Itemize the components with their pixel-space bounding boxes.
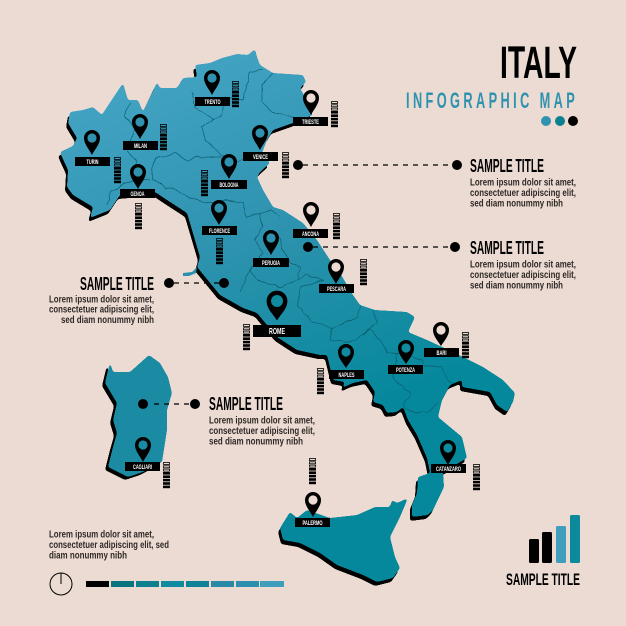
pin: Bologna bbox=[221, 154, 237, 179]
pin: Venice bbox=[252, 125, 268, 150]
label: Milan: MILAN bbox=[134, 143, 147, 150]
label: Bari: BARI bbox=[436, 350, 447, 357]
pin: Perugia bbox=[263, 230, 279, 255]
label: Catanzaro: CATANZARO bbox=[436, 466, 461, 473]
label: Venice bbox=[243, 152, 278, 161]
label: Naples bbox=[329, 370, 364, 379]
leader dots bbox=[138, 160, 462, 409]
label: Bari bbox=[424, 348, 459, 357]
label: Perugia: PERUGIA bbox=[262, 260, 280, 267]
bottom text block: diam nonummy nibh bbox=[49, 550, 127, 562]
bottom text block: consectetuer adipiscing elit, sed bbox=[49, 540, 169, 551]
label: Palermo bbox=[295, 518, 330, 527]
callout: left: sed diam nonummy nibh bbox=[61, 315, 154, 326]
label: Bologna: BOLOGNA bbox=[220, 182, 239, 189]
callout: upper right: SAMPLE TITLE bbox=[470, 156, 544, 176]
label: Pescara bbox=[319, 284, 354, 293]
title: ITALY bbox=[500, 37, 577, 88]
pin: Genoa bbox=[130, 164, 146, 189]
label: Bologna bbox=[211, 180, 247, 189]
callout: Sardinia bbox=[209, 394, 315, 448]
leader lines bbox=[154, 165, 452, 404]
bar chart bbox=[529, 515, 580, 563]
label: Cagliari bbox=[125, 462, 160, 471]
label: Ancona bbox=[293, 229, 328, 238]
pin: Pescara bbox=[328, 259, 344, 284]
pin: Florence bbox=[211, 200, 227, 225]
label: Trento bbox=[195, 97, 230, 106]
callout: upper right: sed diam nonummy nibh bbox=[470, 198, 563, 210]
callout: upper right bbox=[470, 156, 576, 210]
label: Cagliari: CAGLIARI bbox=[133, 464, 152, 471]
callout: middle right: Lorem ipsum dolor sit amet, bbox=[470, 260, 576, 270]
label: Palermo: PALERMO bbox=[302, 520, 322, 527]
callout: middle right: consectetuer adipiscing elit, bbox=[470, 270, 576, 281]
label: Pescara: PESCARA bbox=[327, 286, 346, 293]
callout: middle right: SAMPLE TITLE bbox=[470, 238, 544, 258]
callout: Sardinia: sed diam nonummy nibh bbox=[209, 436, 303, 448]
label: Genoa: GENOA bbox=[130, 191, 145, 198]
callout: left bbox=[49, 274, 154, 326]
pin: Naples bbox=[338, 344, 354, 368]
map: Sicily bbox=[278, 498, 408, 586]
label: Rome bbox=[253, 325, 301, 337]
pin: Trento bbox=[204, 70, 220, 95]
callout: left: consectetuer adipiscing elit, bbox=[49, 304, 154, 316]
pin: Potenza bbox=[398, 340, 414, 364]
label: Trieste bbox=[293, 117, 328, 126]
pin: Palermo bbox=[305, 492, 321, 517]
title dots bbox=[541, 116, 578, 126]
subtitle: INFOGRAPHIC MAP bbox=[406, 88, 575, 113]
label: Perugia bbox=[253, 258, 289, 267]
callout: left: Lorem ipsum dolor sit amet, bbox=[49, 294, 154, 306]
label: Trieste: TRIESTE bbox=[302, 119, 319, 126]
callout: upper right: Lorem ipsum dolor sit amet, bbox=[470, 178, 576, 188]
callout: Sardinia: Lorem ipsum dolor sit amet, bbox=[209, 416, 315, 426]
pin: Rome bbox=[267, 291, 287, 320]
mainland fill bbox=[60, 49, 515, 517]
mainland shadow bbox=[58, 53, 513, 521]
pin: Catanzaro bbox=[440, 440, 456, 465]
label: Naples: NAPLES bbox=[338, 372, 355, 379]
map: Sardinia bbox=[102, 355, 172, 480]
bottom text block bbox=[49, 530, 169, 562]
pin: Ancona bbox=[303, 202, 319, 227]
label: Rome: ROME bbox=[269, 326, 285, 336]
colour legend bar bbox=[86, 581, 284, 587]
label: Catanzaro bbox=[431, 464, 466, 473]
bar chart title: SAMPLE TITLE bbox=[506, 571, 580, 589]
label: Turin: TURIN bbox=[86, 159, 99, 166]
label: Genoa bbox=[120, 189, 155, 198]
stacked gauges beside cities bbox=[114, 82, 480, 490]
label: Trento: TRENTO bbox=[204, 99, 220, 106]
callout: middle right: sed diam nonummy nibh bbox=[470, 280, 563, 292]
label: Ancona: ANCONA bbox=[302, 231, 319, 238]
callout: Sardinia: SAMPLE TITLE bbox=[209, 394, 283, 414]
callout: left: SAMPLE TITLE bbox=[80, 274, 154, 294]
callout: middle right bbox=[470, 238, 576, 292]
pin: Trieste bbox=[303, 90, 319, 115]
islet near Tuscany coast bbox=[183, 267, 197, 276]
region borders bbox=[107, 70, 453, 412]
map: mainland Italy bbox=[58, 49, 515, 521]
pin: Cagliari bbox=[135, 437, 151, 462]
callout: Sardinia: consectetuer adipiscing elit, bbox=[209, 426, 315, 437]
bottom text block: Lorem ipsum dolor sit amet, bbox=[49, 530, 154, 540]
callout: upper right: consectetuer adipiscing elit, bbox=[470, 188, 576, 199]
label: Venice: VENICE bbox=[253, 154, 268, 161]
label: Potenza bbox=[388, 365, 423, 374]
label: Florence: FLORENCE bbox=[209, 228, 230, 235]
pin: Bari bbox=[433, 322, 449, 346]
label: Florence bbox=[202, 226, 237, 235]
pin: Turin bbox=[84, 130, 100, 155]
pin: Milan bbox=[132, 114, 148, 139]
label: Potenza: POTENZA bbox=[396, 367, 415, 374]
icon: clock bbox=[50, 573, 72, 595]
label: Turin bbox=[75, 157, 110, 166]
label: Milan bbox=[123, 141, 158, 150]
